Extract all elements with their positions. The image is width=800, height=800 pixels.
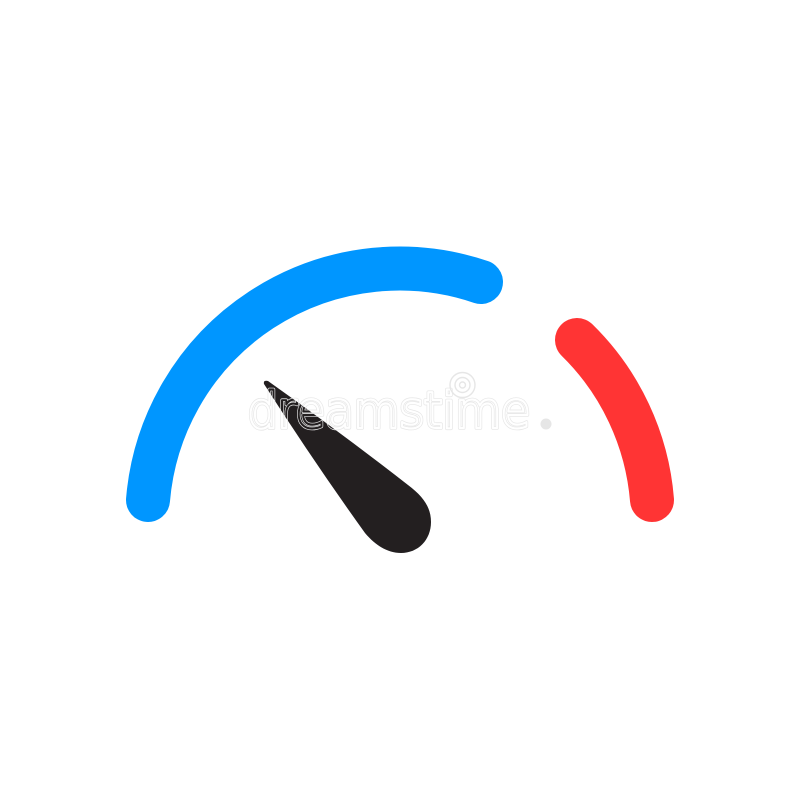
gauge infographic xyxy=(126,246,674,553)
watermark spiral icon xyxy=(450,372,475,398)
red arc: high range xyxy=(577,340,652,500)
watermark xyxy=(249,372,552,430)
blue arc: low range xyxy=(148,269,481,500)
watermark dot xyxy=(540,418,552,430)
needle xyxy=(264,381,431,553)
watermark wordmark: dreamstime xyxy=(248,382,530,441)
